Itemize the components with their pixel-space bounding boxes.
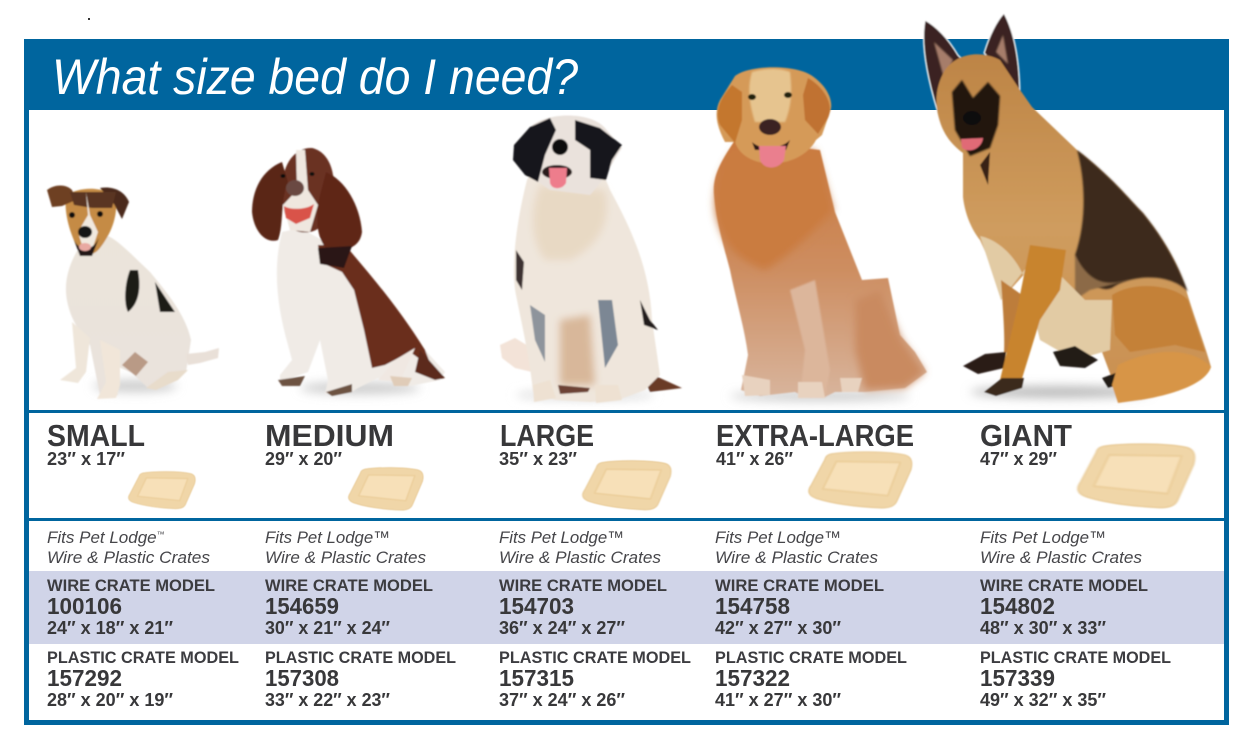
crate fit note: Fits Pet Lodge™ — [265, 528, 390, 547]
photo: extra-large dog — [714, 67, 927, 401]
bed icon — [809, 452, 912, 508]
column: extra-large: 157322 — [715, 665, 790, 691]
bed icon — [1078, 444, 1195, 508]
wire crate model: WIRE CRATE MODEL — [499, 576, 667, 595]
wire crate model: WIRE CRATE MODEL — [980, 576, 1148, 595]
column: medium — [265, 418, 456, 710]
bed dimensions: 29″ x 20″ — [265, 449, 342, 469]
haunch and tail — [1112, 286, 1205, 352]
column: extra-large: Wire & Plastic Crates — [715, 548, 879, 567]
photo: giant dog — [924, 13, 1211, 403]
crate fit note: Fits Pet Lodge™ — [980, 528, 1106, 547]
column: large: Wire & Plastic Crates — [499, 548, 662, 567]
belly — [980, 236, 1112, 360]
bed icon — [349, 468, 423, 510]
ears — [924, 13, 1020, 110]
plastic crate model: PLASTIC CRATE MODEL — [980, 648, 1171, 667]
column: large: 36″ x 24″ x 27″ — [499, 618, 625, 638]
lavender wire crate band — [29, 571, 1224, 644]
column: large: 157315 — [499, 665, 574, 691]
bed dimensions: 35″ x 23″ — [499, 449, 577, 469]
photo: medium dog — [252, 148, 445, 396]
column: medium: 154659 — [265, 593, 339, 619]
size name: GIANT — [980, 418, 1072, 453]
column: extra-large: 41″ x 27″ x 30″ — [715, 690, 841, 710]
column: medium: 33″ x 22″ x 23″ — [265, 690, 390, 710]
plastic crate model: PLASTIC CRATE MODEL — [265, 648, 456, 667]
size name: SMALL — [47, 418, 145, 453]
body — [936, 54, 1211, 400]
column: small: Wire & Plastic Crates — [47, 548, 211, 567]
bed dimensions: 23″ x 17″ — [47, 449, 125, 469]
photo: large dog — [500, 115, 682, 403]
divider lines — [29, 410, 1224, 521]
photo: small dog — [47, 186, 219, 399]
bed dimensions: 41″ x 26″ — [716, 449, 793, 469]
hind paw — [1053, 346, 1118, 388]
bed icon — [128, 472, 195, 509]
column: giant: 154802 — [980, 593, 1055, 619]
column: large: 37″ x 24″ x 26″ — [499, 690, 625, 710]
size name: LARGE — [500, 418, 594, 453]
column: giant: 48″ x 30″ x 33″ — [980, 618, 1106, 638]
face mask — [952, 80, 1000, 156]
title: What size bed do I need? — [52, 49, 578, 105]
column: small: 24″ x 18″ x 21″ — [47, 618, 173, 638]
column: giant: 49″ x 32″ x 35″ — [980, 690, 1106, 710]
plastic crate model: PLASTIC CRATE MODEL — [47, 648, 239, 667]
column: giant: Wire & Plastic Crates — [980, 548, 1143, 567]
column: medium: Wire & Plastic Crates — [265, 548, 427, 567]
crate fit note: Fits Pet Lodge™ — [499, 528, 624, 547]
plastic crate model: PLASTIC CRATE MODEL — [499, 648, 691, 667]
column: large: 154703 — [499, 593, 574, 619]
crate fit note: ™ — [157, 530, 165, 539]
near foreleg — [1000, 245, 1066, 385]
crate fit note: Fits Pet Lodge — [47, 528, 157, 547]
column: small: 100106 — [47, 593, 122, 619]
header band — [24, 39, 1229, 110]
column: giant — [980, 418, 1195, 710]
plastic crate model: PLASTIC CRATE MODEL — [715, 648, 907, 667]
column: extra-large — [715, 418, 914, 710]
column: small: 28″ x 20″ x 19″ — [47, 690, 173, 710]
bed dimensions: 47″ x 29″ — [980, 449, 1057, 469]
far foreleg — [1001, 280, 1025, 354]
size name: EXTRA-LARGE — [716, 418, 914, 453]
column: giant: 157339 — [980, 665, 1055, 691]
wire crate model: WIRE CRATE MODEL — [47, 576, 215, 595]
crate fit note: Fits Pet Lodge™ — [715, 528, 841, 547]
bed icon — [583, 461, 671, 510]
wire crate model: WIRE CRATE MODEL — [265, 576, 433, 595]
column: small — [47, 418, 239, 710]
column: small: 157292 — [47, 665, 122, 691]
column: medium: 157308 — [265, 665, 339, 691]
column: large — [499, 418, 691, 710]
size name: MEDIUM — [265, 418, 394, 453]
column: extra-large: 42″ x 27″ x 30″ — [715, 618, 841, 638]
column: medium: 30″ x 21″ x 24″ — [265, 618, 390, 638]
wire crate model: WIRE CRATE MODEL — [715, 576, 884, 595]
column: extra-large: 154758 — [715, 593, 790, 619]
